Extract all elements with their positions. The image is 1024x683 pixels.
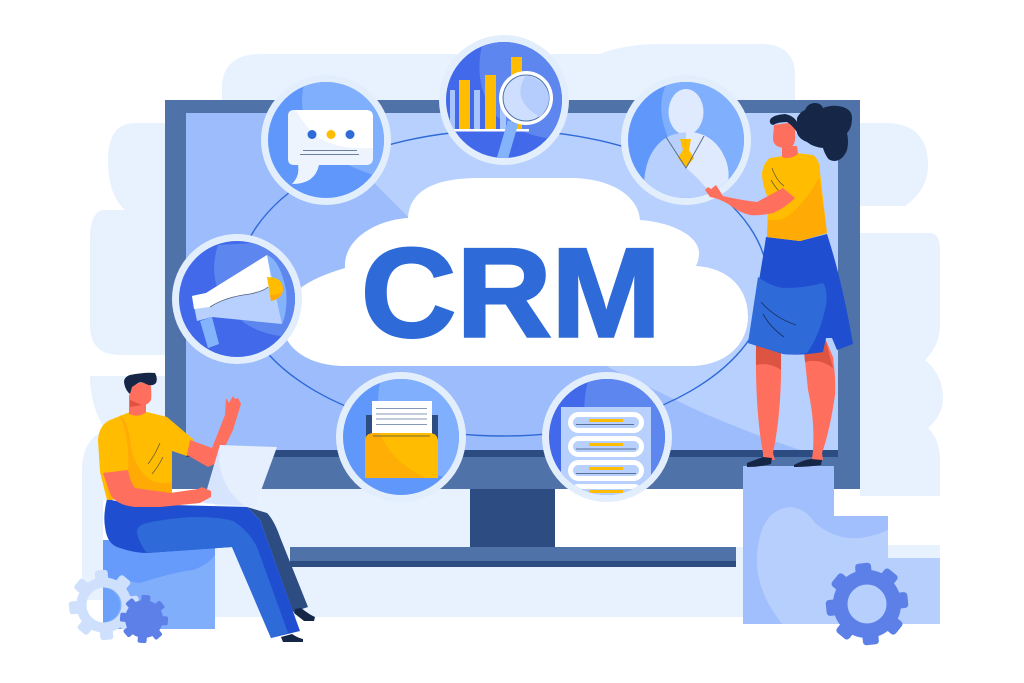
left leg [756,345,781,460]
icon: folder [336,372,470,502]
shoes [747,457,822,467]
icon: megaphone [172,234,305,364]
CRM title: CRM [361,223,661,364]
shirt [762,153,827,241]
arm [705,185,795,215]
gear: blue small [120,595,168,643]
trousers [104,499,300,638]
screen bottom edge [186,450,838,457]
back leg [247,507,308,612]
monitor base [290,547,736,567]
lower arm [103,470,211,507]
back shoe [294,608,315,621]
shirt folds [148,443,163,474]
left leg shadow [756,345,781,370]
head [773,122,795,148]
man sitting with laptop [98,373,315,642]
background blobs [82,44,943,617]
neck shadow [130,400,142,407]
shirt shade [105,415,172,500]
head [129,381,151,405]
right leg shadow [804,338,833,368]
hair [124,373,157,394]
shirt [98,412,194,500]
gear: light [69,570,139,640]
monitor frame [165,100,860,489]
screen highlight [305,113,838,450]
skirt folds [761,302,796,337]
neck [782,146,798,158]
icon: bar chart with magnifier [439,35,570,165]
neck [129,395,146,416]
illustration: CRM infographic [68,35,943,646]
shirt shade [767,178,827,241]
front shoe [281,634,303,642]
woman standing [705,103,853,467]
laptop [203,445,277,507]
connecting ellipse [238,130,768,436]
monitor stand [470,489,555,547]
gear: blue large [825,562,909,646]
cloud [283,178,748,366]
icon: person with tie [621,82,751,205]
monitor base shadow [290,561,736,567]
monitor screen [186,113,838,450]
raised arm [187,396,241,467]
hair front [770,114,798,132]
skirt highlight [748,277,827,354]
monitor [165,100,860,567]
icon: server stack [542,372,672,507]
skirt [748,234,853,355]
stool [103,540,215,629]
white wall right of stand [555,489,745,547]
laptop shade [203,445,245,506]
hair [797,103,852,161]
shirt folds [771,168,784,191]
right leg [804,338,835,460]
podium box [743,466,940,624]
icon: chat bubble [261,70,391,205]
trousers highlight [137,517,288,638]
